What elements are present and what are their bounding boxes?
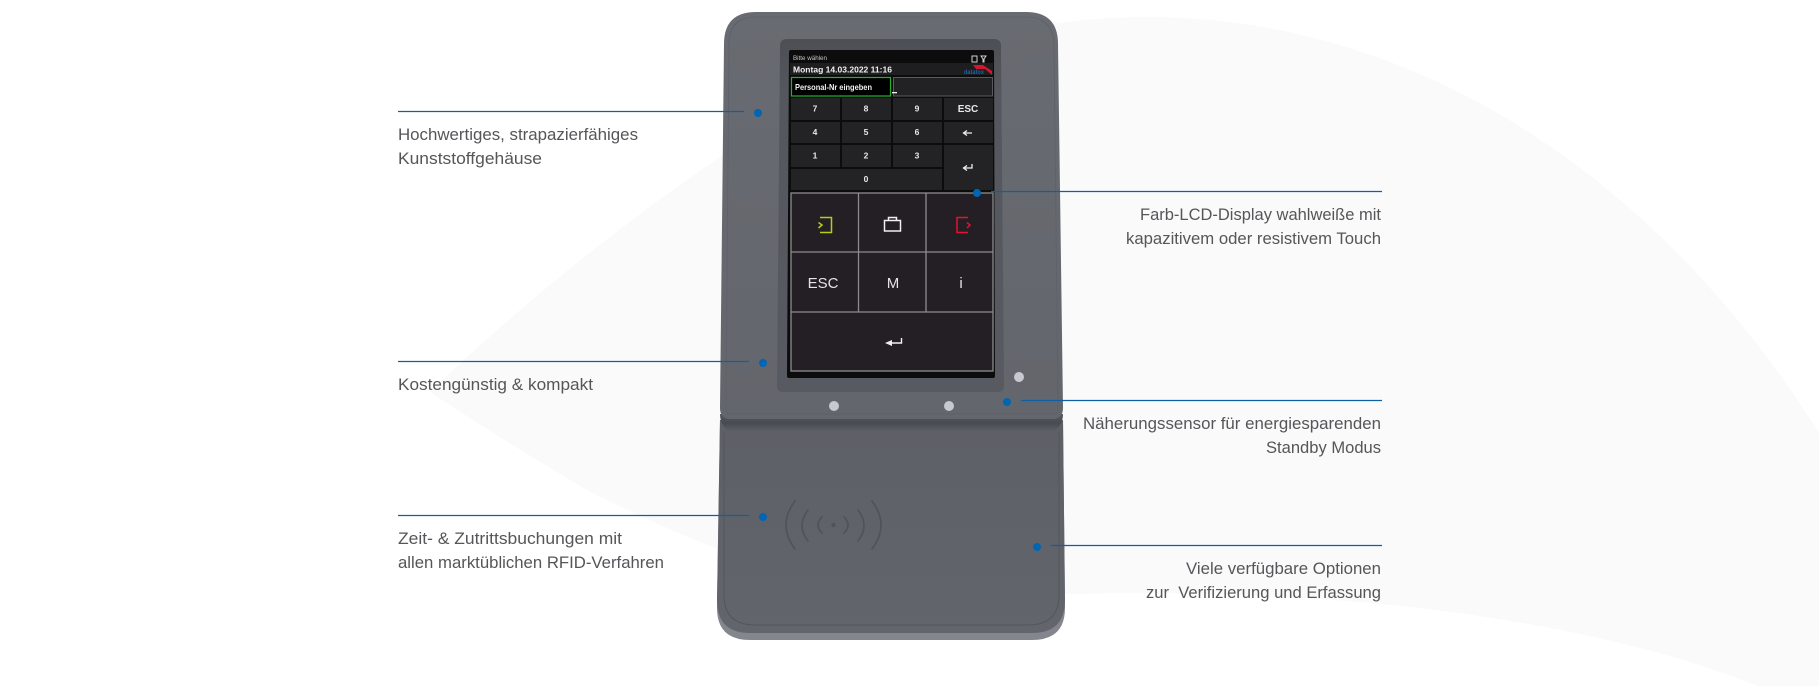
date bar xyxy=(790,63,993,76)
callout: proximity sensor: Standby Modus xyxy=(1266,439,1381,457)
date bar: Montag 14.03.2022 11:16 xyxy=(793,64,892,74)
icon: enter arrow xyxy=(885,338,902,346)
callout: display xyxy=(973,189,1382,248)
LED sensors xyxy=(829,372,1024,411)
logo: datafox xyxy=(964,65,992,76)
keypad: 1 xyxy=(813,150,818,160)
keypad: 3 xyxy=(915,150,920,160)
callout: RFID: allen marktüblichen RFID-Verfahren xyxy=(398,554,664,572)
device: terminal xyxy=(717,12,1065,640)
keypad: 2 xyxy=(864,150,869,160)
keypad xyxy=(791,98,993,190)
screen xyxy=(787,50,995,378)
display recess xyxy=(777,39,1004,392)
function button grid: ESC xyxy=(808,275,839,292)
callout: options: zur Verifizierung und Erfassung xyxy=(1146,584,1381,602)
keypad: 9 xyxy=(915,104,920,114)
keypad: 5 xyxy=(864,127,869,137)
keypad: 0 xyxy=(864,174,869,184)
icon: clock in xyxy=(818,218,832,232)
icon: briefcase xyxy=(884,218,900,231)
callout: proximity sensor xyxy=(1003,398,1382,457)
callout: RFID xyxy=(398,513,767,572)
function button grid: M xyxy=(887,275,899,292)
logo: datafox: datafox xyxy=(964,69,984,76)
callout: proximity sensor: Näherungssensor für energiesparenden xyxy=(1083,415,1381,433)
keypad: 8 xyxy=(864,104,869,114)
keypad: ESC xyxy=(958,104,978,115)
keypad: 6 xyxy=(915,127,920,137)
callout: housing: Kunststoffgehäuse xyxy=(398,150,542,168)
callout: RFID: Zeit- & Zutrittsbuchungen mit xyxy=(398,530,622,548)
callout: cost xyxy=(398,359,767,394)
callout: display: Farb-LCD-Display wahlweiße mit xyxy=(1140,206,1381,224)
input field: Personal-Nr: Personal-Nr eingeben xyxy=(795,82,872,92)
input field: Personal-Nr xyxy=(792,78,992,96)
function button grid: i xyxy=(959,275,963,292)
icon: RFID waves xyxy=(786,501,881,549)
callout: display: kapazitivem oder resistivem Touch xyxy=(1126,230,1381,248)
callout: housing xyxy=(398,109,762,168)
icon: clock out xyxy=(957,218,970,232)
function button grid xyxy=(791,193,993,371)
callout: cost: Kostengünstig & kompakt xyxy=(398,376,593,394)
upper panel: housing xyxy=(720,12,1063,431)
callout: options: Viele verfügbare Optionen xyxy=(1186,560,1381,578)
lower panel: RFID reader base xyxy=(717,420,1065,640)
status bar: Bitte wählen xyxy=(793,56,827,62)
keypad: 7 xyxy=(813,104,818,114)
callout: housing: Hochwertiges, strapazierfähiges xyxy=(398,126,638,144)
status bar xyxy=(793,56,986,62)
keypad: 4 xyxy=(813,127,818,137)
background swoosh shape xyxy=(430,17,1819,686)
callout: options xyxy=(1033,543,1382,602)
